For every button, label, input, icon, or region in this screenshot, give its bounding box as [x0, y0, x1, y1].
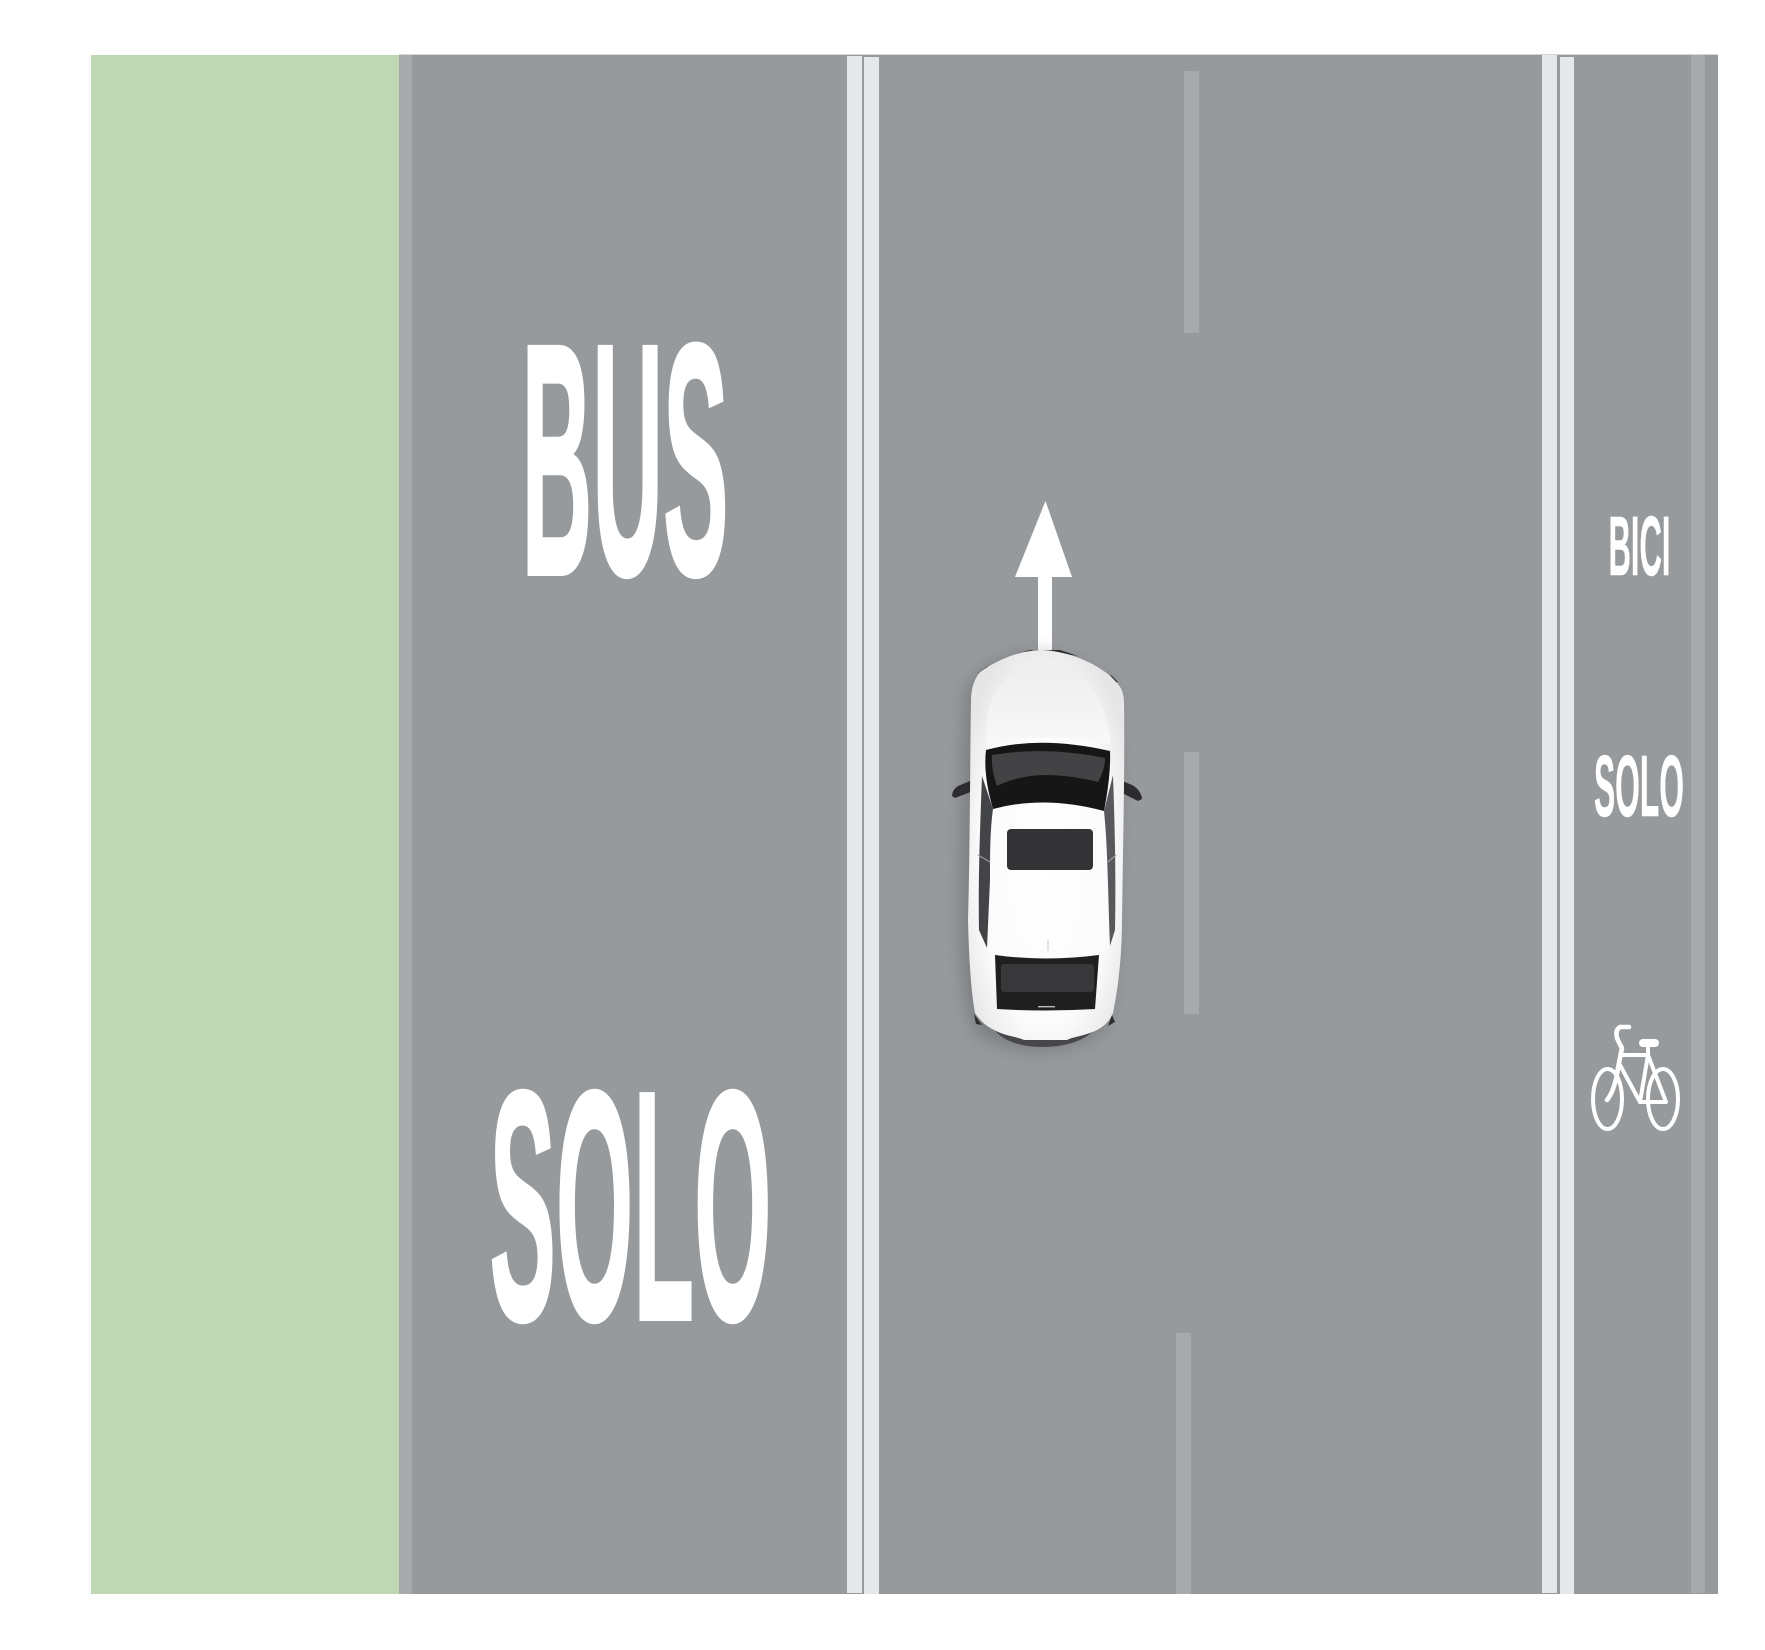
- mirror left: [952, 778, 978, 798]
- direction arrow: [1015, 501, 1072, 652]
- rear window shade: [1001, 964, 1094, 992]
- right edge line of bike lane: [1691, 55, 1705, 1593]
- double line: bus lane separator: [847, 56, 879, 1594]
- boot release line: [1038, 1006, 1055, 1007]
- rear window: [995, 955, 1099, 1010]
- bonnet highlight: [986, 663, 1111, 745]
- rear bumper: [993, 1028, 1096, 1047]
- door seam lines: [978, 855, 1116, 862]
- double line: bike lane separator: [1542, 55, 1574, 1594]
- green verge: [91, 55, 399, 1594]
- road marking: SOLO: SOLO: [490, 1023, 772, 1390]
- left side window: [979, 776, 993, 948]
- icon: bicycle: [1593, 1027, 1678, 1129]
- dashed centre line: [1176, 71, 1199, 1594]
- road surface: [399, 54, 1718, 1594]
- left kerb edge line: [399, 55, 412, 1594]
- road marking: BUS: BUS: [522, 275, 728, 645]
- sunroof: [1007, 829, 1093, 870]
- windshield reflection: [992, 751, 1105, 786]
- windshield: [985, 743, 1110, 811]
- right side window: [1104, 775, 1115, 946]
- mirror right: [1116, 780, 1142, 801]
- car body: [968, 650, 1124, 1040]
- boot emblem: [1047, 940, 1049, 951]
- car, top view: [952, 650, 1142, 1050]
- headlight and tail accents: [974, 650, 1118, 1026]
